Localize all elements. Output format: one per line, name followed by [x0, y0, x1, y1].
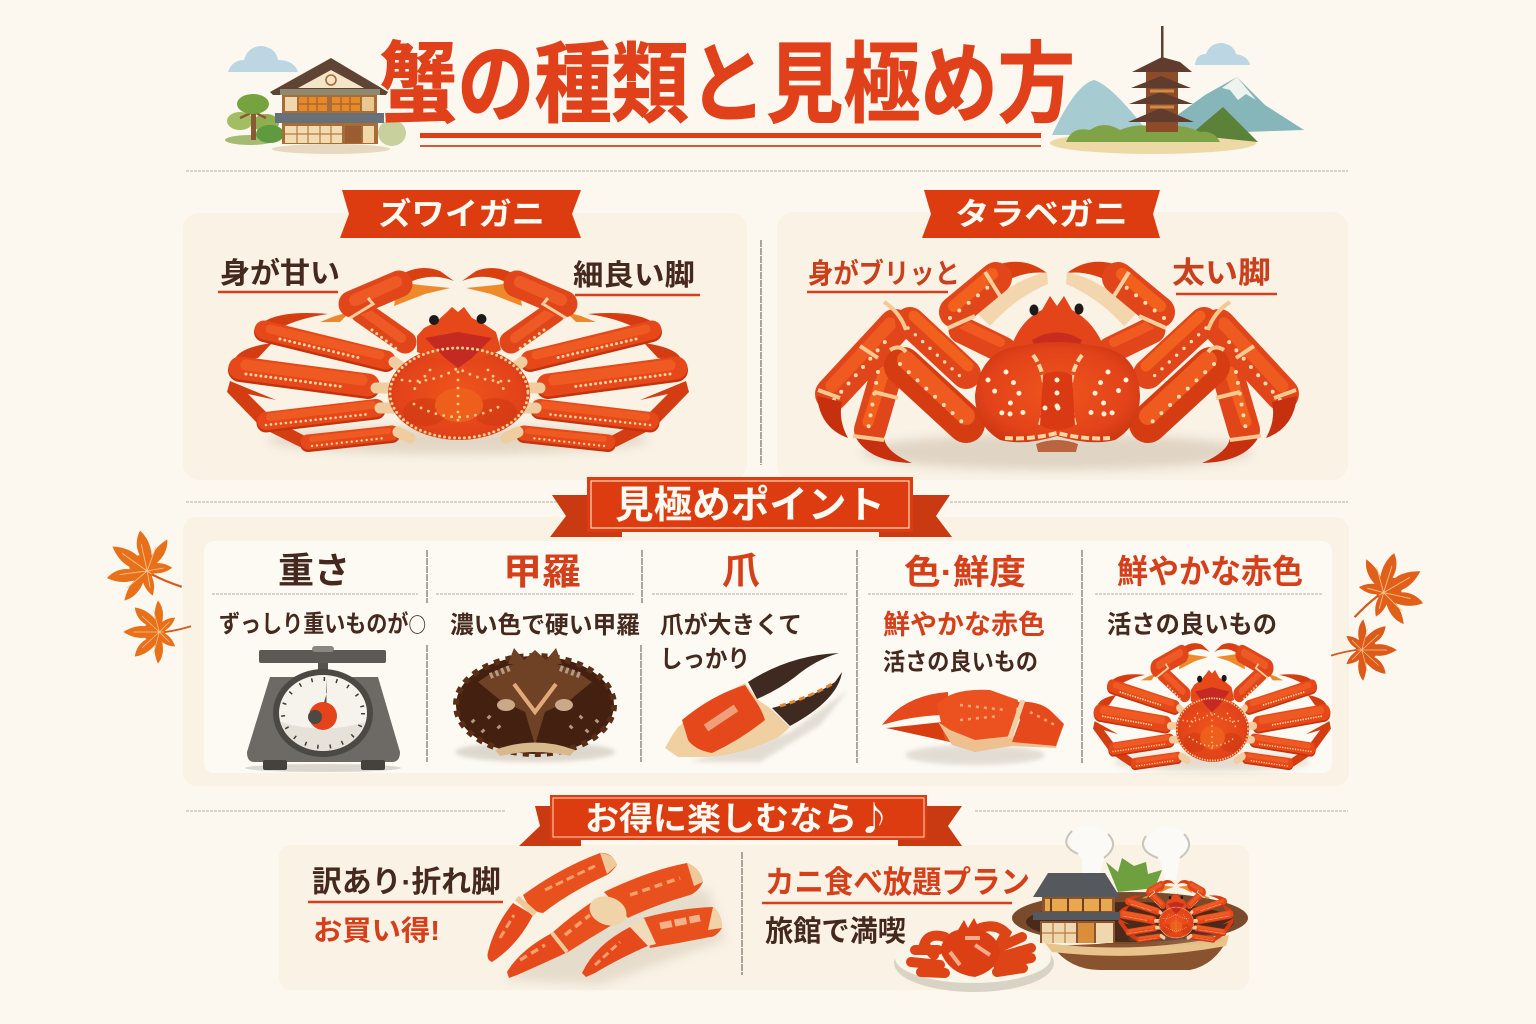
heading: weight: 重さ [278, 550, 350, 591]
icon: mountains and sand [1050, 77, 1304, 154]
panel: king crab content [807, 190, 1297, 470]
leg tips [227, 313, 328, 447]
text: lively: 活さの良いもの [883, 649, 1038, 676]
label: firm meat: 身がブリッと [808, 257, 960, 289]
panel: checkpoints inner [204, 541, 1332, 773]
heading: claw: 爪 [722, 551, 760, 593]
illustration: small crab [1093, 643, 1331, 771]
text: claw note: 爪が大きくて [660, 611, 802, 639]
text: shell note: 濃い色で硬い甲羅 [450, 612, 640, 639]
icon: dark tipped claw [665, 653, 848, 762]
text: weight note: ずっしり重いものが○ [219, 609, 426, 638]
text: ryokan feast: 旅館で満喫 [765, 915, 906, 948]
icon: kitchen scale [245, 646, 401, 772]
heading: king crab: タラベガニ [955, 197, 1128, 232]
text: vivid red: 鮮やかな赤色 [883, 610, 1045, 640]
claw [320, 268, 454, 350]
column: shell [436, 551, 640, 762]
banner: checkpoints [550, 477, 952, 537]
icon: left cloud [228, 46, 298, 72]
carapace [1010, 296, 1105, 350]
heading: colour and freshness: 色·鮮度 [904, 554, 1026, 592]
icon: maple leaf upper right [1332, 539, 1439, 644]
illustration: steaming crab platter [894, 825, 1248, 992]
panel: checkpoints background [183, 517, 1349, 786]
text: claw note [660, 611, 802, 673]
column: claw [652, 551, 848, 762]
title: 蟹の種類と見極め方 [380, 35, 1075, 134]
outer leg [832, 316, 968, 400]
icon: pine tree [225, 94, 284, 145]
text: good value: お買い得! [313, 915, 440, 946]
panel: snow crab content [218, 190, 700, 454]
leaves garnish [1106, 858, 1162, 892]
crab in bowl [1118, 880, 1234, 943]
icon: maple leaf lower left [123, 600, 191, 664]
illustration: broken crab legs [488, 853, 725, 985]
panel: snow crab background [183, 213, 747, 480]
miniature inn [1033, 873, 1120, 943]
banner: bargains [519, 792, 962, 846]
heading: checkpoints: 見極めポイント [615, 485, 885, 527]
column: weight [212, 550, 426, 772]
illustration: king crab [817, 262, 1297, 470]
column: colour and freshness [868, 554, 1073, 765]
label: sweet meat: 身が甘い [220, 256, 340, 290]
text: discount legs: 訳あり·折れ脚 [312, 866, 501, 899]
illustration: snow crab [227, 268, 689, 454]
icon: right cloud [1195, 43, 1250, 65]
legs [240, 329, 410, 446]
icon: pagoda [1128, 26, 1194, 132]
eyes [429, 314, 486, 325]
label: thick legs: 太い脚 [1172, 257, 1271, 290]
icon: brown crab shell [455, 648, 615, 762]
bowl [1052, 938, 1228, 970]
heading: bargains: お得に楽しむなら♪ [585, 792, 891, 840]
heading: snow crab: ズワイガニ [378, 197, 545, 232]
plate [894, 934, 1054, 992]
text: claw note: しっかり [660, 646, 750, 673]
crab on plate [911, 918, 1031, 977]
header: title and scenery [225, 26, 1304, 154]
panel: bargains background [279, 845, 1249, 990]
eyes [1030, 304, 1084, 316]
carapace [388, 346, 530, 440]
icon: maple leaf upper left [91, 516, 199, 623]
text: lively: 活さの良いもの [1107, 611, 1277, 639]
text: all-you-can-eat plan: カニ食べ放題プラン [765, 865, 1030, 900]
icon: ryokan building [270, 58, 406, 154]
banner: snow crab [340, 190, 581, 238]
steam [1066, 825, 1189, 880]
heading: vivid red: 鮮やかな赤色 [1117, 553, 1303, 590]
column: vivid red crab [1093, 553, 1331, 771]
panel: king crab background [777, 212, 1348, 480]
banner: king crab [922, 190, 1160, 238]
heading: shell: 甲羅 [503, 551, 581, 592]
icon: maple leaf lower right [1331, 619, 1397, 681]
inner leg [868, 360, 966, 430]
claw [948, 262, 1048, 350]
title underline [420, 133, 1041, 147]
icon: red claw [882, 690, 1064, 765]
label: long thin legs: 細良い脚 [573, 259, 695, 292]
